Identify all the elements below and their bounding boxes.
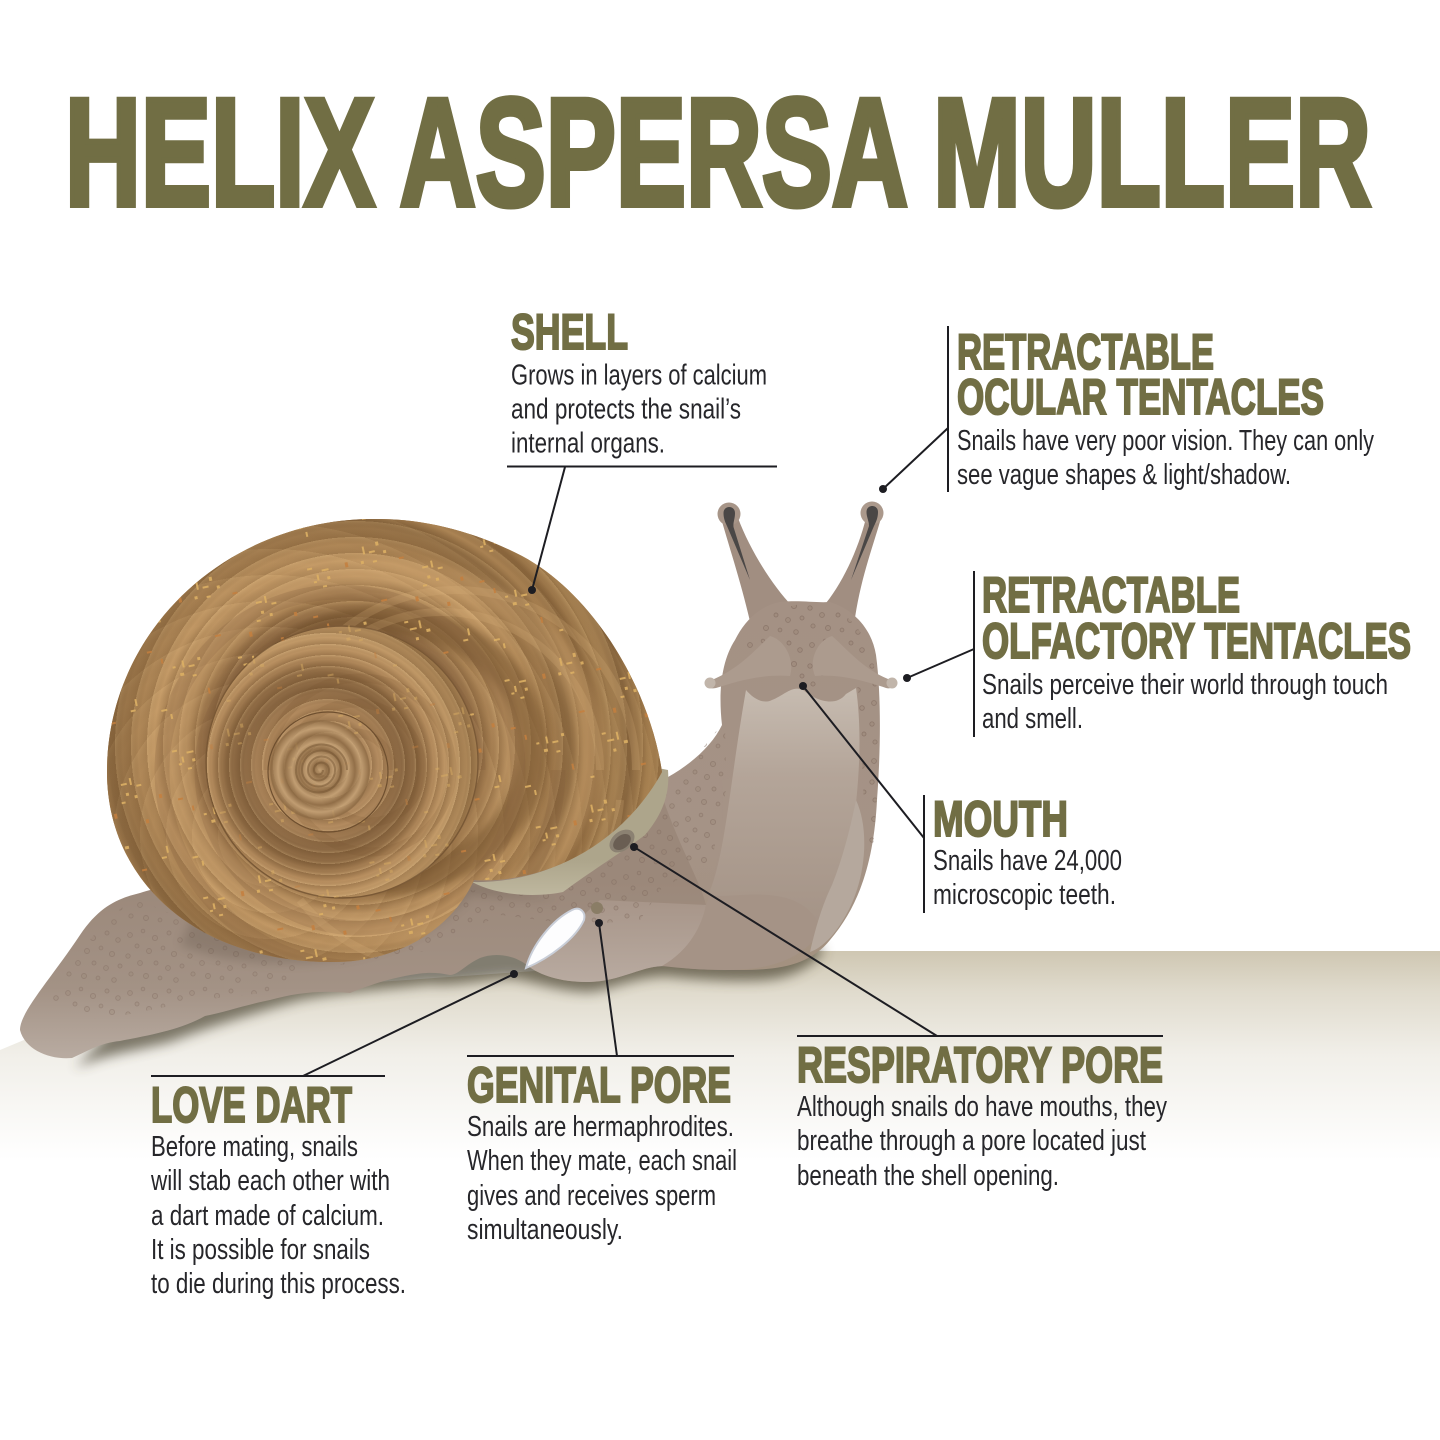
callout: mouth: Snails have 24,000 <box>933 845 1122 877</box>
callout: respiratory pore: beneath the shell opening. <box>797 1160 1059 1192</box>
callout: shell: and protects the snail’s <box>511 394 741 426</box>
callout: retractable ocular tentacles: RETRACTABLE <box>957 324 1214 380</box>
neck and head <box>603 601 880 970</box>
callout: love dart: will stab each other with <box>150 1165 390 1197</box>
callout: respiratory pore <box>630 843 1168 1192</box>
center whorl <box>268 712 388 832</box>
broad dark band <box>237 620 533 880</box>
callout: genital pore <box>467 919 737 1246</box>
shell shadow <box>180 880 560 963</box>
light crescent on foot <box>810 800 864 952</box>
inner whorl <box>206 626 478 898</box>
genital pore opening <box>591 902 603 914</box>
callout: respiratory pore: Although snails do have mouths, they <box>797 1091 1168 1123</box>
foot fold <box>662 760 825 970</box>
callout: genital pore: Snails are hermaphrodites. <box>467 1111 734 1143</box>
callout: love dart: LOVE DART <box>151 1077 352 1133</box>
lower right tentacle <box>813 636 893 688</box>
left eye tentacle <box>718 502 792 630</box>
center spiral line <box>296 744 347 792</box>
shell <box>107 519 662 962</box>
collar <box>472 768 668 895</box>
outer dark spiral stroke <box>162 592 558 968</box>
tail and mid body <box>20 790 706 1058</box>
snail illustration <box>20 500 898 1068</box>
callout: love dart: to die during this process. <box>151 1268 406 1300</box>
callout: love dart: Before mating, snails <box>151 1131 358 1163</box>
right eye tentacle <box>822 502 884 625</box>
dot texture <box>45 603 878 1020</box>
callout: retractable ocular tentacles: see vague shapes & light/shadow. <box>957 459 1291 491</box>
underside panel <box>708 688 859 922</box>
tentacle knobs <box>704 678 898 688</box>
callout: genital pore: gives and receives sperm <box>467 1180 716 1212</box>
callout: shell: Grows in layers of calcium <box>511 360 767 392</box>
callout: retractable olfactory tentacles: and smell. <box>982 703 1083 735</box>
callout: shell: SHELL <box>511 304 628 360</box>
callout: love dart: It is possible for snails <box>151 1234 370 1266</box>
callout: genital pore: When they mate, each snail <box>467 1145 737 1177</box>
callout: mouth <box>799 682 1122 913</box>
callout: respiratory pore: RESPIRATORY PORE <box>797 1037 1163 1093</box>
callout: genital pore: GENITAL PORE <box>467 1057 731 1113</box>
broad light band <box>180 572 590 928</box>
callout: shell: internal organs. <box>511 428 665 460</box>
foot bulge <box>528 900 706 982</box>
callout: retractable olfactory tentacles <box>903 567 1411 737</box>
lower left tentacle <box>708 636 791 688</box>
callout: love dart: a dart made of calcium. <box>151 1200 384 1232</box>
callout: genital pore: simultaneously. <box>467 1214 623 1246</box>
callout: retractable ocular tentacles <box>879 324 1375 493</box>
ground plane <box>0 951 1440 1170</box>
callout: respiratory pore: breathe through a pore located just <box>797 1125 1146 1157</box>
callout: love dart <box>150 970 518 1300</box>
callout: mouth: microscopic teeth. <box>933 879 1116 911</box>
callout: retractable olfactory tentacles: RETRACTABLE <box>982 567 1240 623</box>
respiratory pore opening <box>605 825 639 857</box>
love dart <box>526 909 584 968</box>
body shadow <box>75 900 825 1068</box>
callout: mouth: MOUTH <box>933 791 1068 847</box>
callout: shell <box>507 304 777 594</box>
